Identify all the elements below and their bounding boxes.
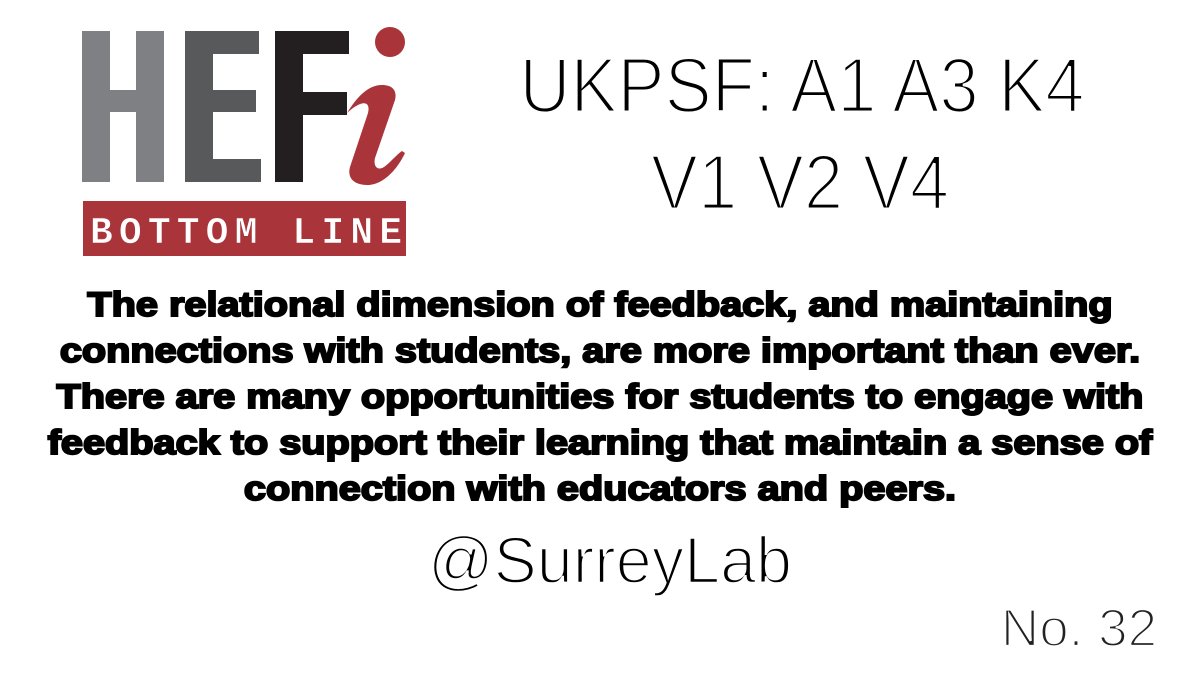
handle: @SurreyLab [428, 523, 792, 597]
heading: UKPSF codes: V1 V2 V4 [651, 138, 949, 226]
letter H [82, 31, 164, 182]
body statement: connections with students, are more important than ever. [60, 332, 1140, 370]
body statement: feedback to support their learning that maintain a sense of [48, 424, 1152, 462]
body statement: connection with educators and peers. [244, 470, 956, 508]
letter E [185, 31, 261, 182]
body statement: There are many opportunities for students to engage with [57, 378, 1143, 416]
banner: BOTTOM LINE [90, 212, 402, 255]
body statement: The relational dimension of feedback, and maintaining [87, 286, 1113, 324]
letter F [275, 31, 349, 182]
issue number: No. 32 [1001, 599, 1157, 658]
letter i [347, 27, 405, 185]
heading: UKPSF codes [520, 41, 1085, 226]
body statement [47, 286, 1154, 508]
logo: HEFi Bottom Line [82, 27, 406, 256]
heading: UKPSF codes: UKPSF: A1 A3 K4 [520, 41, 1085, 129]
